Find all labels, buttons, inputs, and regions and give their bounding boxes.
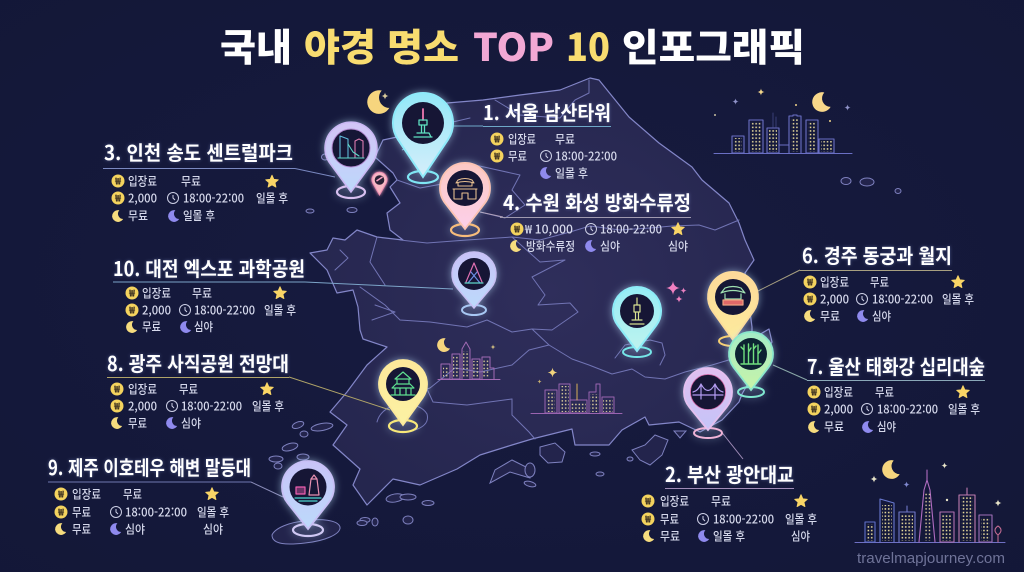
panel: 7 Ulsan [807, 351, 985, 435]
info rows: 입장료 [142, 284, 171, 302]
info rows [54, 486, 229, 538]
icon: Expo tower [465, 263, 483, 283]
info rows: 18:00-22:00 [555, 148, 617, 164]
info rows [110, 380, 284, 432]
info rows: 입장료 [824, 384, 853, 400]
title [220, 17, 805, 72]
info rows: 2,000 [824, 400, 853, 418]
pin: Busan Gwangan Bridge [684, 368, 732, 438]
panel: 6 Gyeongju [800, 240, 974, 324]
info rows [510, 220, 688, 254]
info rows: 심야 [877, 418, 896, 435]
info rows: 18:00-22:00 [877, 400, 938, 418]
info rows: 2,000 [142, 302, 171, 318]
info rows: ₩ [113, 381, 120, 395]
info rows: ₩ [113, 398, 120, 412]
info rows: 방화수류정 [526, 238, 575, 254]
icon: N Seoul Tower [414, 109, 432, 137]
decoration: pink sparkles [666, 281, 687, 302]
info rows: 심야 [668, 238, 688, 254]
pin: unlabeled cyan tower [613, 287, 661, 357]
info rows: 일몰 후 [785, 510, 817, 528]
panel: 4 Suwon [500, 187, 691, 254]
info rows: 일몰 후 [942, 290, 974, 308]
info rows: 18:00-22:00 [181, 398, 242, 414]
decoration: mid skyline [437, 338, 500, 380]
info rows: 무료 [128, 414, 147, 432]
decoration: night sky skyline top right [714, 88, 852, 154]
info rows: 2,000 [128, 398, 157, 414]
info rows [112, 172, 288, 224]
decoration: bottom right skyline [855, 460, 1005, 542]
info rows: 심야 [194, 318, 213, 335]
info rows: ₩ [493, 131, 500, 145]
panel: 10 Daejeon [113, 253, 305, 335]
icon: bamboo [741, 344, 761, 364]
info rows: ₩ [644, 493, 651, 507]
info rows: 심야 [872, 308, 891, 324]
info rows: 일몰 후 [713, 528, 745, 544]
decoration: moon near Seoul [367, 90, 389, 114]
info rows: 무료 [711, 492, 731, 510]
info rows: 무료 [824, 418, 844, 435]
info rows: 무료 [875, 384, 894, 400]
pin: Daejeon Expo [452, 252, 496, 315]
info rows: 심야 [791, 528, 810, 544]
info rows: 18:00-22:00 [125, 504, 187, 520]
info rows: 무료 [181, 172, 201, 190]
heading: 2. 부산 광안대교 [665, 459, 794, 488]
panel: 9 Jeju [48, 452, 251, 538]
info rows: 무료 [128, 207, 148, 224]
info rows [490, 130, 617, 182]
info rows: 무료 [142, 318, 161, 335]
info rows: 입장료 [508, 130, 536, 148]
info rows: 무료 [660, 510, 679, 528]
info rows: 일몰 후 [197, 504, 229, 520]
heading: 6. 경주 동궁과 월지 [802, 240, 952, 269]
map of South Korea [269, 78, 901, 544]
pin: Gyeongju Donggung [708, 272, 758, 346]
info rows: 2,000 [128, 190, 157, 206]
info rows: 무료 [820, 308, 840, 324]
panel: 8 Gwangju [107, 348, 289, 432]
info rows: 일몰 후 [555, 164, 588, 182]
info rows: 심야 [181, 414, 201, 432]
info rows: 무료 [72, 504, 91, 520]
info rows: ₩ [57, 486, 64, 500]
heading: 1. 서울 남산타워 [483, 97, 611, 126]
icon: Donggung pavilion [721, 286, 745, 305]
info rows: 2,000 [820, 290, 849, 308]
pin: Jeju Ihoteu Beach [282, 461, 334, 536]
info rows: 입장료 [660, 492, 689, 510]
info rows: 18:00-22:00 [183, 190, 244, 206]
info rows: 입장료 [128, 172, 157, 190]
info rows: 입장료 [72, 486, 101, 502]
info rows: 일몰 후 [183, 207, 215, 224]
title: 국내 [220, 17, 292, 72]
icon: Gwangan Bridge [693, 384, 723, 399]
info rows: 입장료 [820, 274, 849, 290]
region borders [335, 80, 739, 439]
islands [269, 154, 901, 544]
info rows: ₩ [806, 274, 813, 288]
info rows: ₩ [114, 190, 121, 204]
website url: travelmapjourney.com [857, 551, 1005, 567]
heading: 4. 수원 화성 방화수류정 [503, 187, 691, 216]
info rows: 일몰 후 [264, 302, 296, 318]
panel: 3 Incheon [103, 137, 295, 224]
info rows: 무료 [179, 380, 198, 398]
info rows: ₩ [57, 504, 64, 518]
pin: Gwangju Sajik Park [379, 360, 427, 432]
info rows: 심야 [125, 520, 145, 538]
info rows: 일몰 후 [948, 400, 980, 418]
info rows: 무료 [508, 148, 527, 164]
icon: Songdo towers [338, 136, 364, 158]
icon: horse lighthouse [295, 475, 321, 501]
info rows: 심야 [203, 520, 223, 538]
info rows: 18:00-22:00 [194, 302, 255, 318]
info rows: 무료 [72, 520, 91, 538]
info rows: 입장료 [128, 380, 157, 398]
info rows: 무료 [870, 274, 889, 290]
info rows [808, 384, 980, 435]
pin: small pink marker [372, 172, 387, 195]
heading: 10. 대전 엑스포 과학공원 [113, 253, 305, 282]
info rows: 18:00-22:00 [713, 510, 774, 528]
info rows [804, 274, 974, 324]
info rows: 무료 [123, 486, 142, 502]
icon: tower [630, 298, 644, 324]
info rows: ₩ [128, 285, 135, 299]
map landmass [310, 78, 772, 505]
info rows: 18:00-22:00 [872, 290, 933, 308]
panel: 2 Busan [642, 459, 817, 544]
info rows: ₩ [810, 401, 817, 415]
info rows: ₩ [644, 511, 651, 525]
heading: 7. 울산 태화강 십리대숲 [807, 351, 985, 380]
info rows: 무료 [660, 528, 680, 544]
info rows: 18:00-22:00 [600, 220, 662, 238]
info rows: 무료 [192, 284, 212, 302]
title: TOP [473, 17, 554, 72]
leader lines [251, 126, 807, 497]
heading: 8. 광주 사직공원 전망대 [107, 348, 289, 377]
info rows: 일몰 후 [256, 190, 288, 206]
title: 10 [566, 17, 610, 72]
info rows: 일몰 후 [252, 398, 284, 414]
heading: 3. 인천 송도 센트럴파크 [104, 137, 293, 166]
info rows [126, 284, 296, 335]
pin: Ulsan Taehwagang bamboo [729, 332, 773, 397]
title: 인포그래픽 [622, 17, 805, 72]
info rows: ₩ [128, 302, 135, 316]
info rows: 심야 [600, 238, 620, 254]
info rows: ₩ [810, 384, 817, 398]
panel: 1 Seoul [483, 97, 617, 182]
decoration: south skyline [531, 368, 622, 414]
info rows [642, 492, 817, 544]
heading: 9. 제주 이호테우 해변 말등대 [48, 452, 251, 481]
info rows: ₩ [493, 148, 500, 162]
icon: observatory pagoda [391, 372, 415, 395]
info rows: 무료 [555, 130, 575, 148]
info rows: ₩ [513, 221, 520, 235]
title: 야경 명소 [304, 17, 459, 72]
pin: Seoul Namsan Tower [393, 93, 453, 183]
info rows: ₩ 10,000 [524, 220, 573, 238]
info rows: ₩ [806, 291, 813, 305]
pin: Suwon Hwaseong [440, 163, 490, 236]
info rows: ₩ [114, 173, 121, 187]
pin: Incheon Songdo [325, 122, 377, 198]
icon: Hwaseong gate [453, 178, 477, 199]
